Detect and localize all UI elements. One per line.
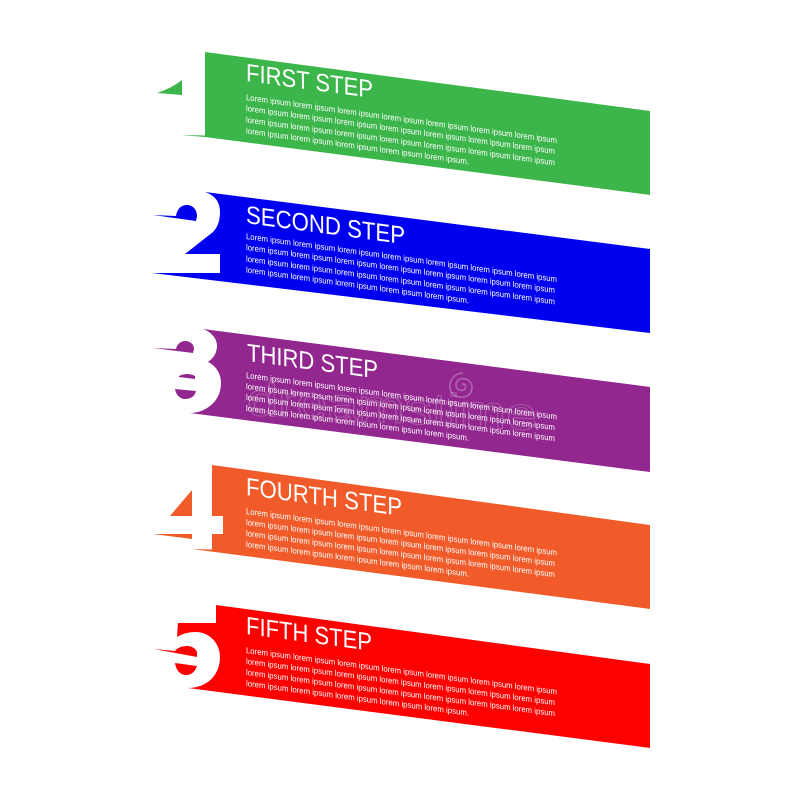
band: red	[177, 605, 650, 748]
body text: lorem ipsum lorem ipsum lorem ipsum lorem ipsum lorem ipsum.	[246, 265, 469, 305]
body text: lorem ipsum lorem ipsum lorem ipsum lorem ipsum lorem ipsum lorem ipsum lorem ipsum	[246, 392, 555, 443]
body text: Lorem ipsum lorem ipsum lorem ipsum lorem ipsum lorem ipsum lorem ipsum lorem ipsum	[246, 370, 557, 421]
heading: first step: FIRST STEP	[246, 59, 373, 104]
body text: lorem ipsum lorem ipsum lorem ipsum lorem ipsum lorem ipsum lorem ipsum lorem ipsum	[246, 254, 555, 306]
panel: fifth step	[154, 582, 650, 748]
panel: fourth step	[153, 444, 650, 609]
number cut-out: lower counter	[175, 663, 197, 675]
body text: lorem ipsum lorem ipsum lorem ipsum lorem ipsum lorem ipsum.	[246, 126, 469, 166]
number 4: 4	[160, 444, 225, 574]
heading: fourth step: FOURTH STEP	[246, 473, 402, 522]
number cut-out: middle counter	[179, 374, 195, 379]
number 3: 3	[155, 306, 220, 436]
body text: lorem ipsum lorem ipsum lorem ipsum lorem ipsum lorem ipsum lorem ipsum lorem ipsum	[246, 517, 555, 568]
panel: first step	[150, 31, 650, 195]
body text: lorem ipsum lorem ipsum lorem ipsum lorem ipsum lorem ipsum.	[246, 403, 469, 443]
watermark: spiral	[450, 373, 472, 397]
number 5: 5	[155, 582, 220, 712]
body text: Lorem ipsum lorem ipsum lorem ipsum lorem ipsum lorem ipsum lorem ipsum lorem ipsum	[246, 645, 557, 696]
number cut-out: blue counter	[153, 205, 197, 221]
band: purple	[190, 329, 650, 472]
body text: lorem ipsum lorem ipsum lorem ipsum lorem ipsum lorem ipsum lorem ipsum lorem ipsum	[246, 242, 555, 295]
heading: third step: THIRD STEP	[247, 339, 378, 384]
number cut-out: upper counter	[153, 341, 194, 353]
number cut-out: upper counter	[154, 646, 197, 657]
body text: Lorem ipsum lorem ipsum lorem ipsum lorem ipsum lorem ipsum lorem ipsum lorem ipsum	[246, 231, 557, 284]
number cut-out: lower sliver	[153, 534, 192, 539]
body text: lorem ipsum lorem ipsum lorem ipsum lorem ipsum lorem ipsum lorem ipsum lorem ipsum	[246, 115, 555, 167]
body text: lorem ipsum lorem ipsum lorem ipsum lorem ipsum lorem ipsum lorem ipsum lorem ipsum	[246, 381, 555, 432]
band: green	[181, 52, 650, 195]
body text: lorem ipsum lorem ipsum lorem ipsum lorem ipsum lorem ipsum.	[246, 539, 469, 579]
band: orange	[192, 465, 650, 609]
band: blue	[152, 192, 650, 333]
number 2: 2	[155, 168, 220, 298]
number cut-out: lower counter	[175, 389, 196, 399]
body text: Lorem ipsum lorem ipsum lorem ipsum lorem ipsum lorem ipsum lorem ipsum lorem ipsum	[246, 92, 557, 145]
number cut-out: triangle counter	[170, 490, 192, 516]
body text: lorem ipsum lorem ipsum lorem ipsum lorem ipsum lorem ipsum.	[246, 678, 469, 718]
heading: second step: SECOND STEP	[246, 201, 405, 250]
body text: lorem ipsum lorem ipsum lorem ipsum lorem ipsum lorem ipsum lorem ipsum lorem ipsum	[246, 667, 555, 718]
body text: lorem ipsum lorem ipsum lorem ipsum lorem ipsum lorem ipsum lorem ipsum lorem ipsum	[246, 656, 555, 707]
number cut-out: green triangle	[157, 80, 182, 95]
number 1: 1	[150, 31, 215, 161]
body text: lorem ipsum lorem ipsum lorem ipsum lorem ipsum lorem ipsum lorem ipsum lorem ipsum	[246, 103, 555, 156]
heading: fifth step: FIFTH STEP	[246, 612, 372, 657]
panel: second step	[152, 168, 650, 333]
body text: Lorem ipsum lorem ipsum lorem ipsum lorem ipsum lorem ipsum lorem ipsum lorem ipsum	[246, 506, 557, 557]
body text: lorem ipsum lorem ipsum lorem ipsum lorem ipsum lorem ipsum lorem ipsum lorem ipsum	[246, 528, 555, 579]
watermark: wordmark: dreamstime	[247, 373, 537, 440]
panel: third step	[153, 306, 650, 472]
